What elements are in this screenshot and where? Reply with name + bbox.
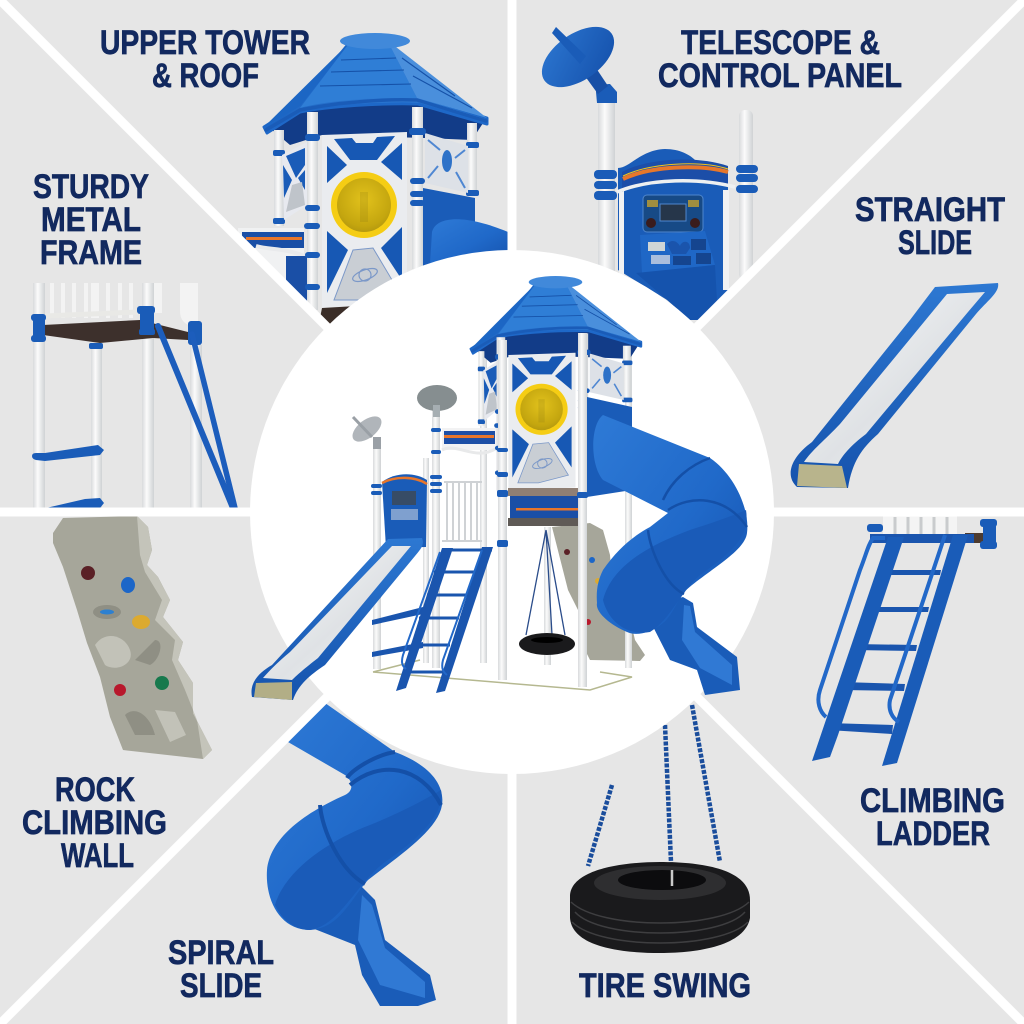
- ladder steps: [828, 570, 941, 734]
- heading: upper tower and roof: [100, 24, 310, 95]
- white posts: [598, 103, 753, 280]
- heading: telescope and control panel: CONTROL PANEL: [658, 57, 902, 95]
- heading: sturdy metal frame: FRAME: [40, 234, 142, 272]
- panel: climbing ladder image: [812, 516, 997, 766]
- spiral tube mini: [593, 415, 747, 634]
- heading: spiral slide: [168, 934, 274, 1005]
- tire: [570, 862, 750, 953]
- heading: straight slide: [855, 191, 1005, 262]
- tower roof: [264, 33, 487, 145]
- straight slide mini: [252, 538, 423, 700]
- hand rails: [818, 535, 945, 722]
- side rungs: [372, 607, 423, 657]
- spiral chute: [312, 885, 436, 1006]
- heading: upper tower and roof: UPPER TOWER: [100, 24, 310, 62]
- ladder mini: [396, 547, 493, 693]
- mini control panel: [371, 428, 442, 548]
- central playground illustration: [252, 276, 747, 700]
- posts: [33, 283, 202, 508]
- heading: tire swing: TIRE SWING: [579, 967, 751, 1005]
- heading: climbing ladder: LADDER: [876, 815, 990, 853]
- small grey dish: [348, 411, 386, 449]
- tower lower posts and deck: [497, 333, 588, 687]
- slide tip: [797, 464, 847, 488]
- heading: sturdy metal frame: [33, 168, 149, 272]
- chains: [588, 705, 720, 885]
- tower roof: [471, 276, 641, 363]
- control panel body: [617, 149, 735, 320]
- control buttons console: [640, 231, 715, 273]
- heading: telescope and control panel: TELESCOPE &: [681, 24, 880, 62]
- heading: spiral slide: SLIDE: [180, 967, 262, 1005]
- panel: rock climbing wall image: [53, 516, 212, 759]
- panel: upper tower and roof image: [238, 33, 508, 330]
- climbing holds: [81, 566, 169, 696]
- heading: rock climbing wall: CLIMBING: [22, 804, 167, 842]
- post clamps: [594, 165, 758, 200]
- heading: climbing ladder: [860, 782, 1005, 853]
- deck under tower: [320, 306, 350, 324]
- heading: straight slide: SLIDE: [898, 224, 972, 262]
- rainbow banner behind tower: [238, 228, 308, 306]
- ladder rails: [812, 535, 968, 766]
- heading: rock climbing wall: ROCK: [55, 771, 135, 809]
- background posts: [373, 350, 632, 669]
- heading: sturdy metal frame: METAL: [41, 201, 141, 239]
- tower left side panel: [478, 351, 498, 426]
- spiral chute mini: [643, 597, 740, 695]
- control screen: [643, 195, 703, 232]
- icon: telescope dish: [542, 26, 617, 103]
- rock wall mini: [552, 523, 645, 661]
- heading: rock climbing wall: WALL: [61, 837, 134, 875]
- panel: tire swing image: [570, 705, 750, 953]
- panel: sturdy metal frame image: [31, 283, 235, 508]
- platform deck: [43, 312, 188, 343]
- diagonal blue braces: [158, 326, 235, 508]
- blue brackets: [31, 306, 202, 349]
- heading: spiral slide: SPIRAL: [168, 934, 274, 972]
- spiral tube: [267, 703, 442, 930]
- slide tube opening: [423, 188, 508, 268]
- white safety fence: [442, 482, 482, 541]
- panel: spiral slide image: [267, 703, 442, 1006]
- banner sign: [442, 428, 497, 453]
- tire swing mini: [519, 530, 575, 655]
- large grey dish: [417, 385, 457, 417]
- ladder rungs: [32, 445, 104, 508]
- tower left side panel: [273, 130, 307, 226]
- central white circle: [250, 250, 774, 774]
- heading: telescope and control panel: [658, 24, 902, 95]
- ground frame: [373, 660, 632, 690]
- tower front structure: [304, 107, 479, 310]
- panel: straight slide image: [791, 283, 998, 488]
- heading: upper tower and roof: & ROOF: [152, 57, 259, 95]
- panel: telescope and control panel image: [531, 15, 758, 320]
- slide sides: [791, 283, 998, 488]
- tower blue box: [587, 397, 632, 497]
- heading: rock climbing wall: [22, 771, 167, 875]
- platform top: [867, 516, 997, 549]
- tower front: [494, 333, 632, 491]
- slide bed: [804, 292, 985, 464]
- heading: sturdy metal frame: STURDY: [33, 168, 149, 206]
- white balusters: [50, 283, 198, 324]
